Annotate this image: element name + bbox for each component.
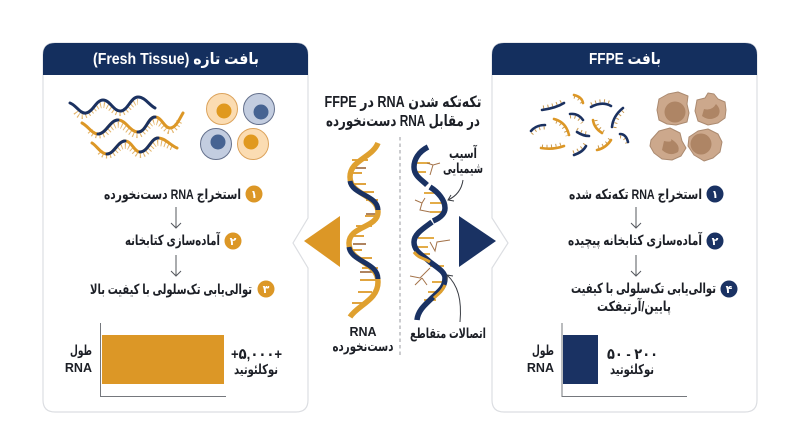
arrow [631,207,641,228]
step 3 FFPE: ۴ [726,284,733,296]
step 3 FFPE [571,280,738,315]
bar chart: fresh RNA length [65,323,282,396]
panel: FFPE tissue [492,43,757,412]
icon: fragmented RNA [531,95,628,155]
bar chart: FFPE RNA length: طول [532,343,554,358]
icon: intact RNA helix [349,143,378,317]
fresh panel header [43,43,308,75]
icon: fragmented RNA helix [410,147,450,320]
panel: fresh tissue [43,43,308,412]
icon: healthy cells [200,94,274,160]
icon: intact RNA strands [70,97,183,156]
arrow [171,207,181,228]
label: intact RNA [332,325,394,355]
arrow: toward FFPE panel [459,216,496,267]
step 3 fresh: ۳ [263,284,270,296]
central title: در مقابل RNA دست‌نخورده [326,113,480,130]
bar chart: FFPE RNA length: RNA [527,361,554,375]
icon: damaged cells [650,92,726,161]
step 1 fresh: استخراج RNA دست‌نخورده [104,186,241,203]
bar chart: FFPE RNA length: نوکلئوتید [610,362,654,377]
label: chemical damage: شیمیایی [443,160,483,176]
step 3 fresh: توالی‌یابی تک‌سلولی با کیفیت بالا [90,281,252,298]
crosslinks [410,163,450,285]
step 2 FFPE: ۲ [712,236,719,248]
label: chemical damage: آسیب [449,144,478,161]
step 2 fresh: آماده‌سازی کتابخانه [125,231,221,248]
step 2 fresh: ۲ [230,236,237,248]
step 3 FFPE: پایین/آرتیفکت [597,297,671,315]
arrow: toward fresh panel [304,216,340,267]
bar chart: FFPE RNA length: ۵۰ - ۲۰۰ [607,346,658,363]
label: intact RNA: دست‌نخورده [332,338,394,355]
step 1 fresh: ۱ [251,189,257,201]
central title [324,94,482,130]
FFPE panel header: بافت FFPE [589,51,661,68]
step 1 FFPE: ۱ [712,189,718,201]
bar chart: fresh RNA length: RNA [65,361,92,375]
bar chart: fresh RNA length: طول [70,343,92,358]
label: crosslinks [410,275,486,342]
bar chart: fresh RNA length: نوکلئوتید [234,362,278,377]
label: chemical damage [443,144,483,201]
fresh panel header: بافت تازه (Fresh Tissue) [93,51,259,68]
central title: تکه‌تکه شدن RNA در FFPE [324,94,482,111]
label: crosslinks: اتصالات متقاطع [410,325,486,342]
bar chart: fresh RNA length: +۵,۰۰۰+ [231,346,282,363]
bar chart: FFPE RNA length [527,323,687,396]
divider line [399,137,401,355]
step 1 FFPE: استخراج RNA تکه‌تکه شده [569,186,702,203]
label: intact RNA: RNA [349,325,377,339]
step 3 FFPE: توالی‌یابی تک‌سلولی با کیفیت [571,280,716,297]
arrow [171,255,181,276]
arrow [631,255,641,276]
step 2 FFPE: آماده‌سازی کتابخانه پیچیده [568,231,703,249]
FFPE panel header [492,43,757,75]
